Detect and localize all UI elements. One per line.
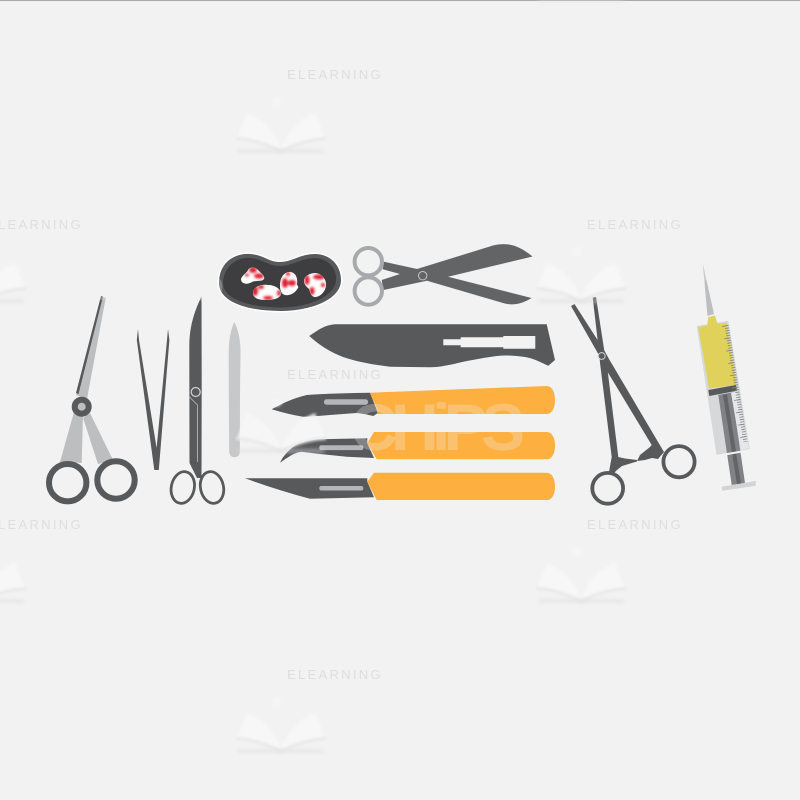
wordmark: ELEARNING [287, 667, 383, 682]
watermark: eLearning Chips, centre [236, 367, 525, 464]
watermark: eLearning Chips, lower left [0, 517, 225, 614]
watermark: eLearning Chips, bottom [236, 667, 525, 764]
top edge line [0, 0, 800, 1]
book [536, 547, 626, 603]
watermark: eLearning Chips, top [236, 67, 525, 164]
wordmark: ELEARNING [587, 217, 683, 232]
watermark: top edge shadows [538, 0, 624, 1]
book [0, 547, 26, 603]
icon: kidney dish with tissue [218, 252, 342, 312]
watermark: eLearning Chips, upper left [0, 217, 225, 314]
book shadow [0, 600, 24, 602]
wordmark: ELEARNING [287, 367, 383, 382]
tissue piece 1 [241, 268, 264, 284]
icon: large scissors with grey blades [49, 296, 135, 501]
wordmark: ELEARNING [287, 67, 383, 82]
plunger rod [718, 392, 745, 485]
watermark: eLearning Chips, lower right [536, 517, 800, 614]
dish body [219, 254, 341, 311]
book [236, 697, 326, 753]
icon: grey scalpel handle [229, 322, 241, 457]
book shadow [538, 300, 624, 302]
logo text: CHiPS [350, 690, 525, 764]
logo text: CHiPS [350, 90, 525, 164]
book shadow [538, 600, 624, 602]
barrel [697, 321, 750, 456]
book shadow [238, 450, 324, 452]
icon: syringe with yellow fluid [697, 263, 756, 491]
dish rim [218, 252, 342, 312]
logo text: CHiPS [350, 390, 525, 464]
watermark: eLearning Chips, upper right [536, 217, 800, 314]
logo text: CHiPS [50, 540, 225, 614]
book [236, 97, 326, 153]
logo text: CHiPS [50, 240, 225, 314]
book [536, 247, 626, 303]
icon: orange-handled scalpel 1 [272, 386, 555, 417]
icon: large scalpel blade [309, 324, 555, 367]
icon: orange-handled scalpel 2 [280, 432, 555, 463]
icon: open scissors, horizontal [355, 244, 532, 305]
icon: tweezers [137, 329, 169, 470]
dish inner [223, 258, 336, 308]
scale window [731, 392, 749, 450]
book shadow [238, 750, 324, 752]
plunger rod centre [723, 394, 741, 484]
icon: long thin scissors [168, 296, 227, 506]
plunger seal [708, 385, 737, 396]
book [0, 247, 26, 303]
icon: hemostat forceps [571, 297, 695, 504]
thumb plate [722, 481, 756, 491]
tissue piece 3 [280, 272, 298, 296]
wordmark: ELEARNING [587, 517, 683, 532]
barrel flange [716, 449, 750, 457]
scale ticks [725, 325, 745, 442]
book [236, 397, 326, 453]
book shadow [238, 150, 324, 152]
yellow fluid [698, 316, 737, 388]
icon: orange-handled scalpel 3 [245, 473, 555, 500]
needle [703, 263, 714, 316]
book shadow [0, 300, 24, 302]
tissue piece 4 [304, 273, 326, 297]
tissue piece 2 [252, 284, 281, 300]
